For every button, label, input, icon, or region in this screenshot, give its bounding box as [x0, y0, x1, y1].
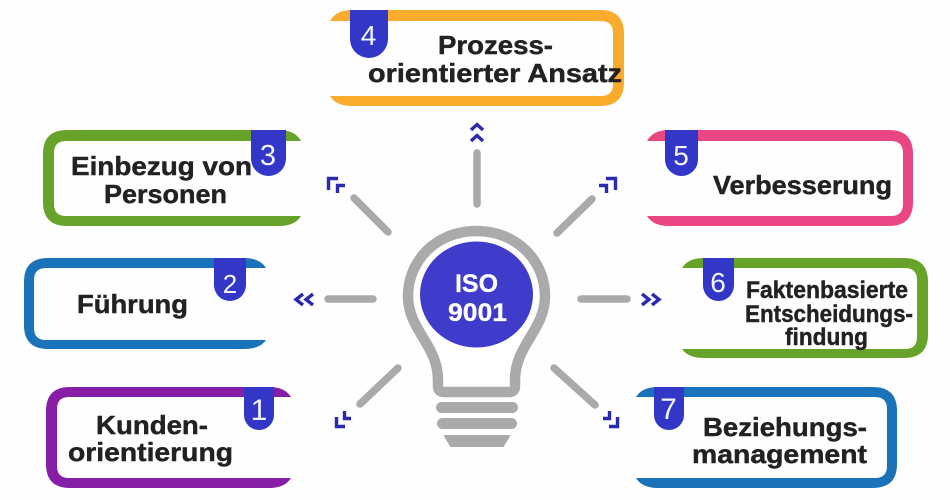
- frame: [46, 387, 291, 488]
- panel 2: Führung: [24, 258, 266, 349]
- panel 3: Einbezug von Personen: [43, 130, 301, 226]
- badge 5: [665, 130, 698, 176]
- panel text: [692, 412, 867, 469]
- panel 5: Verbesserung: [647, 130, 913, 226]
- panel text: Beziehungs-: [703, 412, 867, 442]
- panel text: Kunden-: [96, 410, 208, 440]
- panel text: orientierung: [68, 437, 233, 467]
- frame: [330, 10, 624, 106]
- panel text: Entscheidungs-: [745, 301, 913, 328]
- bulb base: [436, 402, 518, 446]
- panel 1: Kundenorientierung: [46, 387, 291, 488]
- panel 4: Prozessorientierter Ansatz: [330, 10, 624, 106]
- number 2: 2: [223, 269, 237, 299]
- frame: [24, 258, 266, 349]
- label: ISO 9001: [448, 270, 507, 327]
- light bulb with ISO 9001: [408, 231, 545, 446]
- badge 6: [703, 258, 734, 301]
- panel text: [368, 30, 622, 88]
- badge 2: [214, 258, 246, 301]
- panel text: Einbezug von: [71, 151, 252, 181]
- number 6: 6: [710, 267, 726, 298]
- panel text: [68, 410, 233, 467]
- panel text: [745, 277, 913, 351]
- label: ISO 9001: ISO: [455, 270, 498, 298]
- label: ISO 9001: 9001: [448, 299, 507, 327]
- number 5: 5: [673, 140, 689, 171]
- blue circle: [420, 242, 533, 348]
- rays: [328, 153, 627, 405]
- panel text: [71, 151, 252, 209]
- frame: [636, 387, 897, 488]
- panel text: management: [692, 439, 867, 469]
- panel 7: Beziehungsmanagement: [636, 387, 897, 488]
- panel 6: Faktenbasierte Entscheidungsfindung: [682, 258, 928, 358]
- badge 3: [251, 130, 286, 176]
- number 4: 4: [361, 20, 376, 51]
- panel text: Faktenbasierte: [746, 277, 908, 304]
- frame: [43, 130, 301, 226]
- panel text: findung: [785, 324, 868, 351]
- badge 4: [350, 10, 388, 58]
- frame: [647, 130, 913, 226]
- number 3: 3: [260, 140, 276, 172]
- direction arrows: [296, 124, 659, 426]
- panel text: orientierter Ansatz: [368, 58, 622, 88]
- number 7: 7: [660, 393, 677, 426]
- badge 7: [654, 387, 684, 430]
- bulb outline: [408, 231, 545, 392]
- panel text: Prozess-: [438, 30, 553, 60]
- panel text: Führung: [77, 289, 188, 319]
- badge 1: [244, 387, 274, 430]
- panel text: Verbesserung: [713, 170, 892, 200]
- number 1: 1: [251, 394, 267, 427]
- panel text: Personen: [104, 179, 227, 209]
- frame: [682, 258, 928, 358]
